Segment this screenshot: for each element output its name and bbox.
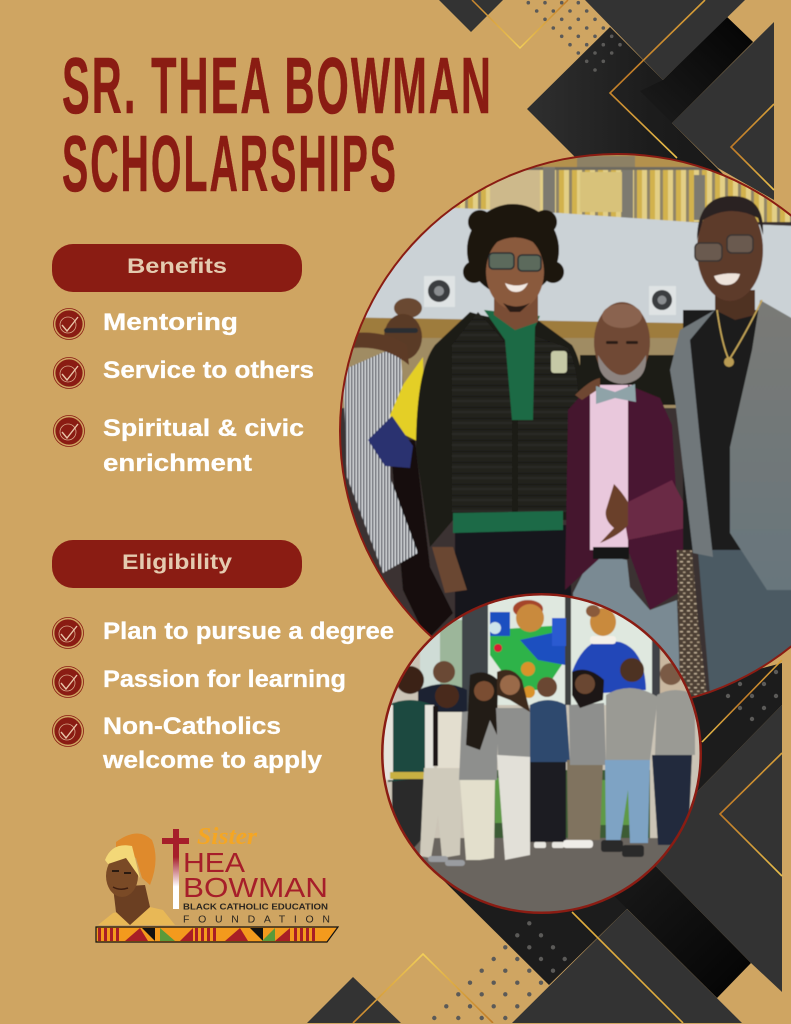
icon: check Service bbox=[54, 358, 84, 388]
woman with long hair bbox=[460, 780, 495, 860]
logo wordmark bbox=[183, 847, 328, 903]
icon: check Passion bbox=[52, 666, 84, 698]
geometric decoration: top right bbox=[439, 0, 774, 300]
woman in tan pants bbox=[567, 760, 603, 840]
woman in white pants bbox=[497, 755, 531, 860]
item: Non-Catholics welcome to apply bbox=[102, 713, 322, 774]
carpet bbox=[677, 550, 707, 695]
pill heading: Benefits bbox=[52, 244, 302, 292]
logo wordmark: BOWMAN bbox=[183, 872, 328, 903]
item: Plan to pursue a degree: Plan to pursue a degree bbox=[103, 618, 394, 645]
item: Mentoring: Mentoring bbox=[103, 309, 238, 336]
students bbox=[384, 658, 695, 866]
title bbox=[62, 41, 493, 208]
item: Spiritual and civic enrichment: Spiritual & civic bbox=[103, 415, 304, 442]
cross bbox=[162, 829, 189, 909]
icon: check Plan bbox=[52, 618, 84, 648]
man with navy pants bbox=[652, 755, 692, 845]
pill heading: Eligibility: Eligibility bbox=[122, 551, 232, 574]
back row man bbox=[433, 661, 455, 683]
Sister script: Sister bbox=[197, 824, 258, 850]
item: Non-Catholics welcome to apply: Non-Catholics bbox=[103, 713, 281, 740]
item: Service to others: Service to others bbox=[103, 357, 314, 384]
portrait of Sister Thea bbox=[98, 833, 175, 925]
woman in striped dress bbox=[343, 298, 453, 640]
pill heading: Eligibility bbox=[52, 540, 302, 588]
man with blue jeans bbox=[605, 760, 650, 843]
woman in denim jacket bbox=[530, 750, 566, 842]
small circular photo: group of students before stained glass bbox=[380, 590, 705, 923]
icon: check Non-Catholics bbox=[52, 716, 84, 746]
title: SCHOLARSHIPS bbox=[62, 119, 398, 208]
student with glasses and black vest bbox=[416, 204, 584, 640]
man in green jacket bbox=[392, 778, 424, 848]
large circular photo: three men at an event bbox=[330, 150, 791, 720]
item: Non-Catholics welcome to apply: welcome to apply bbox=[102, 747, 322, 774]
kente strip bbox=[96, 927, 338, 942]
item: Spiritual and civic enrichment: enrichment bbox=[103, 450, 252, 477]
item: Spiritual and civic enrichment bbox=[103, 415, 304, 477]
logo subline: FOUNDATION bbox=[183, 914, 330, 926]
icon: check Spiritual bbox=[54, 416, 84, 446]
logo: Sister Thea Bowman Black Catholic Education Foundation bbox=[96, 824, 338, 942]
item: Passion for learning: Passion for learning bbox=[103, 666, 346, 693]
benefits list bbox=[54, 308, 314, 477]
logo wordmark: HEA bbox=[183, 847, 245, 878]
logo subline: BLACK CATHOLIC EDUCATION bbox=[183, 902, 328, 912]
geometric decoration: bottom right bbox=[307, 660, 782, 1023]
older man in maroon velvet jacket bbox=[564, 302, 684, 672]
logo subline bbox=[183, 902, 330, 926]
woman in striped pants bbox=[420, 768, 462, 858]
pill heading: Benefits: Benefits bbox=[127, 255, 227, 278]
stained glass figures bbox=[489, 600, 646, 698]
icon: check Mentoring bbox=[54, 308, 84, 340]
eligibility list bbox=[52, 618, 394, 774]
tall man in grey blazer bbox=[670, 196, 791, 695]
